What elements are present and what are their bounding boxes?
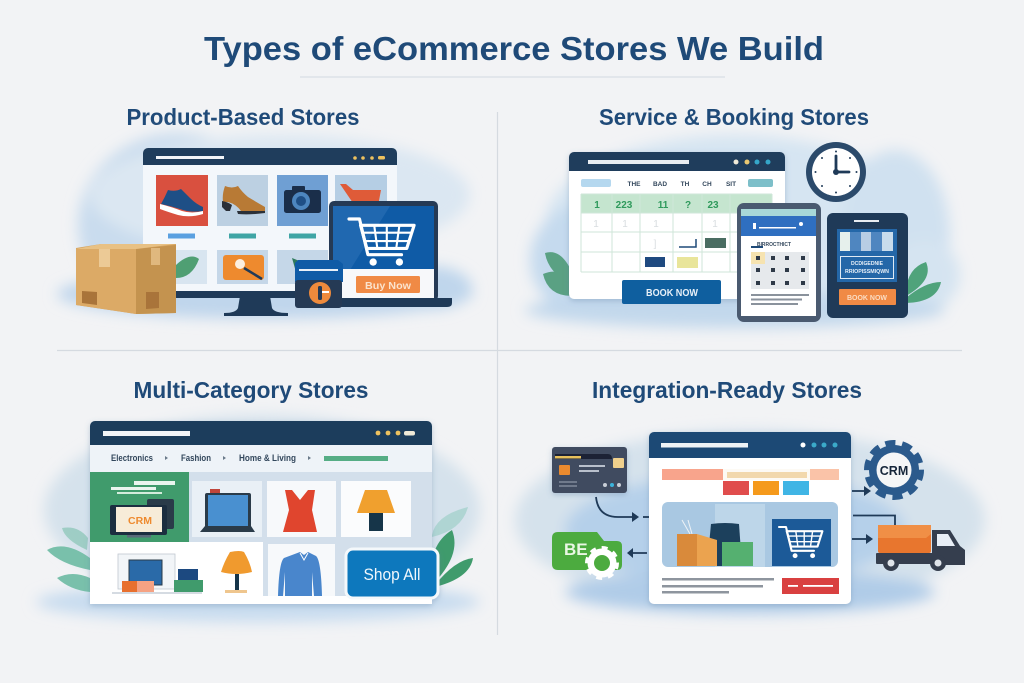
calendar weekday labels: TH xyxy=(681,181,690,188)
icon: cart panel xyxy=(772,519,831,566)
calendar weekday labels: THE xyxy=(628,181,641,188)
calendar weekday labels: CH xyxy=(702,181,712,188)
calendar date numbers: 1 xyxy=(594,200,600,211)
icon: right leaves xyxy=(431,507,473,587)
icon: CRM monitor: CRM xyxy=(128,515,152,527)
icon: desktop monitor storefront xyxy=(143,148,397,316)
icon: CRM gear xyxy=(867,443,921,497)
icon: parcels xyxy=(677,520,753,566)
icon: phone booking screen: RRIOPISSMIQWN xyxy=(845,269,889,275)
icon: orange tag with magnifier xyxy=(223,255,264,280)
category navigation: Home & Living xyxy=(239,453,296,464)
icon: right leaves xyxy=(906,262,941,303)
icon: blue sweater xyxy=(278,552,322,596)
heading: service and booking stores: Service & Booking Stores xyxy=(599,104,869,130)
icon: CRM monitor xyxy=(110,499,174,538)
icon: BE badge with gear: BE xyxy=(564,540,588,559)
button: book now xyxy=(622,280,721,304)
button: phone book now: BOOK NOW xyxy=(847,293,888,302)
button: shop all: Shop All xyxy=(364,565,420,584)
button: book now: BOOK NOW xyxy=(646,288,699,299)
icon: delivery truck xyxy=(876,525,965,571)
button: buy now: Buy Now xyxy=(365,280,412,292)
icon: brown shoe xyxy=(222,186,265,214)
icon: red cart xyxy=(340,184,381,206)
calendar browser window: 1 xyxy=(622,219,628,230)
icon: blue sneaker xyxy=(160,189,203,216)
calendar date numbers: ? xyxy=(685,200,691,211)
panel: product-based stores xyxy=(57,104,473,319)
icon: credit card xyxy=(552,447,627,493)
calendar browser window xyxy=(569,152,785,304)
calendar date numbers: 223 xyxy=(616,200,633,211)
heading: product-based stores: Product-Based Stores xyxy=(126,104,360,130)
icon: tablet booking screen xyxy=(737,203,821,322)
icon: table lamp xyxy=(357,490,395,531)
icon: green leaves xyxy=(176,257,199,278)
icon: red dress xyxy=(283,490,317,532)
category navigation: Fashion xyxy=(181,453,211,464)
calendar grid lines xyxy=(581,194,772,272)
icon: tablet booking screen: BIRROCTHICT xyxy=(757,242,792,248)
icon: orange lamp xyxy=(221,551,252,593)
calendar weekday labels: BAD xyxy=(653,181,667,188)
icon: camera xyxy=(284,186,321,213)
calendar browser window: ] xyxy=(654,239,657,250)
calendar date numbers: 11 xyxy=(658,200,669,211)
icon: CRM gear: CRM xyxy=(880,464,908,478)
category navigation xyxy=(111,453,296,464)
panel: integration-ready stores xyxy=(515,377,985,614)
button: shop all xyxy=(346,549,438,598)
icon: left leaves xyxy=(47,527,90,592)
icon: laptop xyxy=(200,489,255,532)
tablet calendar dots xyxy=(756,256,805,285)
calendar browser window: 1 xyxy=(653,219,659,230)
icon: wallet with coin xyxy=(295,260,343,308)
arrows: integrations xyxy=(596,486,895,558)
panel: service and booking stores xyxy=(525,104,960,328)
category browser window xyxy=(90,421,438,604)
calendar weekday labels xyxy=(628,181,736,188)
icon: wall clock xyxy=(806,142,866,202)
calendar browser window: 1 xyxy=(593,219,599,230)
title: Types of eCommerce Stores We Build xyxy=(204,30,824,67)
calendar browser window: 1 xyxy=(712,219,718,230)
icon: phone booking screen xyxy=(827,213,908,318)
category navigation: Electronics xyxy=(111,453,153,464)
icon: phone booking screen: DCDIGEDNIE xyxy=(851,261,884,267)
icon: home electronics xyxy=(112,554,203,594)
heading: multi-category stores: Multi-Category Stores xyxy=(134,377,368,403)
icon: BE badge with gear xyxy=(552,532,622,578)
heading: integration-ready stores: Integration-Ready Stores xyxy=(592,377,862,403)
icon: laptop with cart xyxy=(329,201,452,307)
panel: multi-category stores xyxy=(36,377,480,622)
calendar date numbers: 23 xyxy=(707,200,719,211)
icon: cardboard box xyxy=(76,244,176,314)
calendar weekday labels: SIT xyxy=(726,181,736,188)
calendar date numbers xyxy=(594,200,719,211)
icon: left leaves xyxy=(543,252,572,296)
button: red call to action xyxy=(782,578,839,594)
store browser window xyxy=(649,432,851,604)
